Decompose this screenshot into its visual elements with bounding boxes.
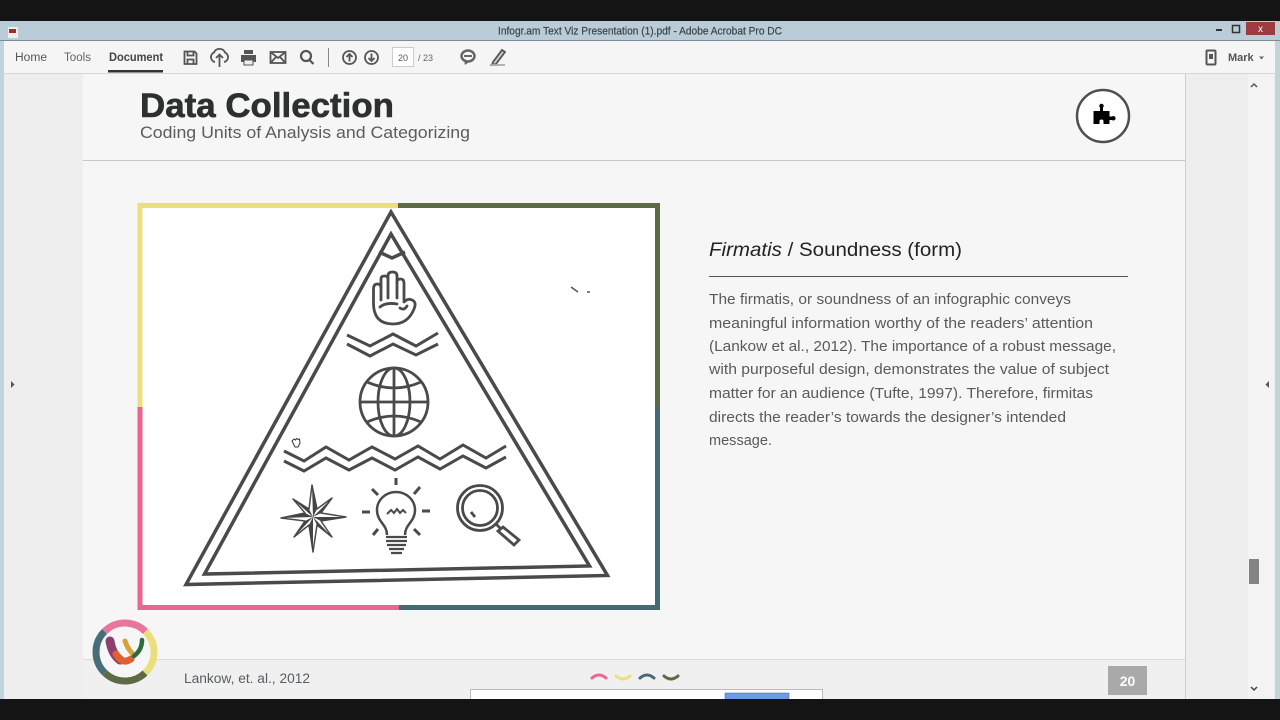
icon: globe xyxy=(360,368,428,436)
frame top right: olive xyxy=(398,206,658,407)
logo ring: yellow xyxy=(145,632,154,673)
icon: mail xyxy=(270,52,286,63)
top black bar xyxy=(0,0,1280,21)
frame bottom left: pink xyxy=(140,407,399,608)
frame top left: yellow xyxy=(140,206,398,407)
section heading: Firmatis / Soundness (form) xyxy=(709,240,962,261)
bottom black bar xyxy=(0,699,1280,720)
window controls xyxy=(1216,22,1275,35)
frame bottom right: teal xyxy=(399,407,658,608)
left navigation gutter xyxy=(4,74,83,699)
icon: search xyxy=(301,51,314,64)
window title text: Infogr.am Text Viz Presentation (1).pdf - Adobe Acrobat Pro DC xyxy=(498,26,782,38)
logo ring: teal xyxy=(96,632,105,673)
tab: Tools: Tools xyxy=(64,52,91,64)
icon: save xyxy=(184,52,196,64)
icon: light bulb xyxy=(362,478,430,553)
icon: acrobat document xyxy=(8,27,18,38)
toolbar xyxy=(4,41,1275,74)
body paragraph: The firmatis, or soundness of an infographic conveys xyxy=(709,291,1071,308)
logo ring: pink xyxy=(104,623,146,632)
upper zigzag lines xyxy=(347,333,438,356)
page number field xyxy=(392,48,414,66)
window controls: x xyxy=(1258,24,1263,35)
icon: raised hand xyxy=(374,272,415,324)
icon: previous page xyxy=(343,51,356,64)
pyramid outer outline xyxy=(186,212,608,584)
logo ring: olive xyxy=(105,673,145,681)
lower zigzag lines xyxy=(284,445,506,471)
subheading: Coding Units of Analysis and Categorizing xyxy=(140,123,470,142)
page number field: 20 xyxy=(398,53,408,63)
pyramid inner outline xyxy=(204,234,590,574)
overlay dialog fragment xyxy=(470,690,822,702)
icon: comment xyxy=(462,50,474,65)
page number badge: 20 xyxy=(1120,673,1135,689)
tab: Document: Document xyxy=(109,52,163,64)
icon: scroll up xyxy=(1251,84,1257,87)
stray marks xyxy=(571,287,590,292)
footer xyxy=(83,659,1185,702)
toolbar divider xyxy=(328,48,329,67)
body paragraph: (Lankow et al., 2012). The importance of a robust message, xyxy=(709,338,1116,355)
user name: Mark xyxy=(1228,52,1255,64)
page number badge xyxy=(1108,666,1147,695)
icon: print xyxy=(241,50,256,65)
right side panel xyxy=(1185,74,1275,699)
body paragraph: matter for an audience (Tufte, 1997). Therefore, firmitas xyxy=(709,385,1093,402)
icon: compass star xyxy=(281,485,346,552)
icon: pen xyxy=(490,50,505,65)
icon: left panel arrow xyxy=(11,381,14,388)
icon: upload xyxy=(211,49,228,67)
panel: firmatis text xyxy=(708,240,1128,449)
heading rule xyxy=(709,276,1128,277)
logo xyxy=(93,620,157,684)
icon: hand cursor xyxy=(292,438,300,447)
body paragraph: meaningful information worthy of the readers’ attention xyxy=(709,315,1093,332)
icon: mobile device xyxy=(1206,50,1216,64)
title bar xyxy=(0,21,1280,41)
icon: scroll down xyxy=(1251,687,1257,690)
tab: Document xyxy=(108,52,163,72)
body paragraph: directs the reader’s towards the designer’s intended xyxy=(709,409,1066,426)
logo brush W xyxy=(110,640,142,661)
citation: Lankow, et. al., 2012 xyxy=(184,671,310,686)
scrollbar thumb xyxy=(1249,559,1259,584)
page total: / 23 xyxy=(418,53,433,63)
slide page xyxy=(83,74,1185,699)
body paragraph: with purposeful design, demonstrates the value of subject xyxy=(708,361,1110,378)
icon: caret xyxy=(1259,56,1264,60)
body paragraph xyxy=(708,291,1116,449)
tab: Home: Home xyxy=(15,52,47,64)
icon: puzzle piece badge xyxy=(1077,90,1129,142)
body paragraph: message. xyxy=(709,432,772,449)
icon: magnifying glass xyxy=(458,486,519,545)
pyramid cap line xyxy=(379,252,405,258)
icon: right panel arrow xyxy=(1266,381,1269,388)
heading: Data Collection xyxy=(140,87,394,125)
icon: next page xyxy=(365,51,378,64)
panel: triangle illustration with coloured frame xyxy=(140,205,658,608)
pagination marks xyxy=(592,675,678,679)
